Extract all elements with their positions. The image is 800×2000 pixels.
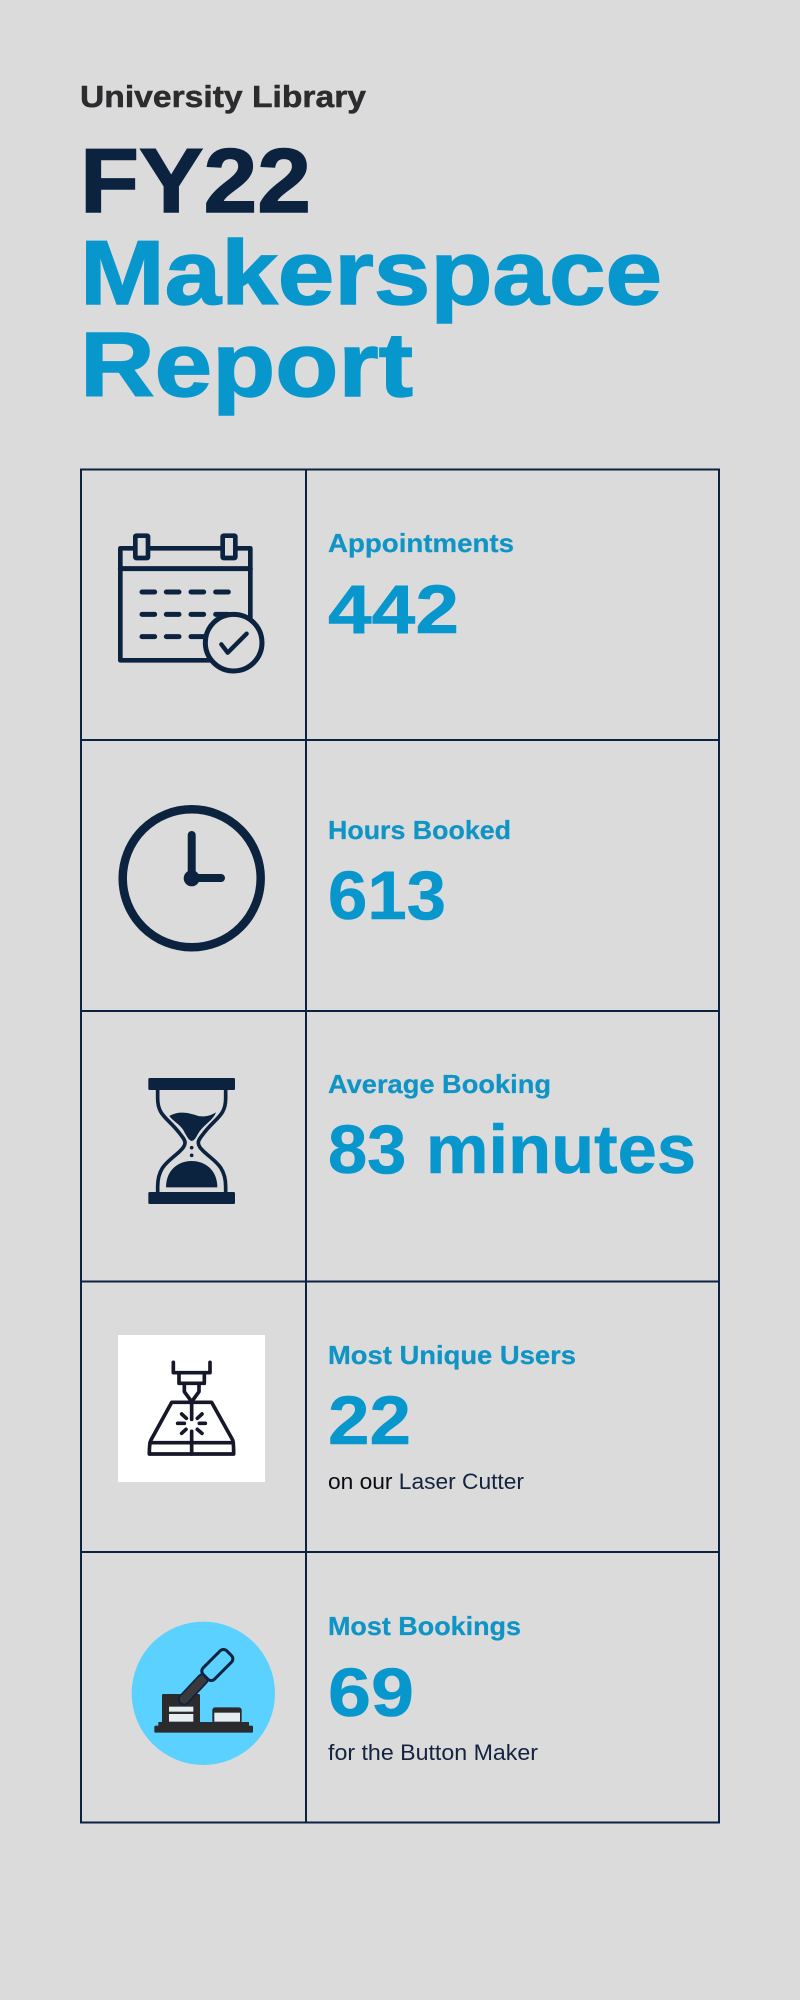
value: 22: 22 — [328, 1382, 411, 1459]
icon: clock — [123, 809, 261, 947]
icon: calendar with check mark — [120, 536, 262, 671]
label: Most Bookings: Most Bookings — [328, 1611, 521, 1641]
caption: for the Button Maker: for the Button Maker — [328, 1740, 538, 1765]
panel: statistics table — [81, 470, 719, 1822]
row: appointments — [120, 528, 514, 671]
row: most unique users — [118, 1335, 576, 1494]
row: hours booked — [123, 809, 511, 947]
value: 83 minutes: 83 minutes — [328, 1111, 696, 1188]
title line: FY22: FY22 — [80, 131, 311, 232]
icon: hourglass — [148, 1078, 235, 1204]
label: Appointments: Appointments — [328, 528, 514, 558]
row: most bookings — [132, 1611, 538, 1765]
label: Hours Booked: Hours Booked — [328, 815, 511, 845]
value: 69: 69 — [328, 1654, 414, 1731]
title line: Makerspace: Makerspace — [80, 223, 662, 324]
row: average booking — [148, 1069, 696, 1204]
title line: Report: Report — [80, 315, 413, 416]
label: Most Unique Users: Most Unique Users — [328, 1340, 576, 1370]
icon: laser cutter on white tile — [118, 1335, 265, 1482]
caption: on our Laser Cutter: on our Laser Cutter — [328, 1469, 524, 1494]
label: Average Booking: Average Booking — [328, 1069, 551, 1099]
value: 442: 442 — [328, 571, 459, 648]
value: 613: 613 — [328, 857, 446, 934]
header: organisation and report title — [80, 79, 662, 416]
organisation name: University Library — [80, 79, 367, 114]
icon: button maker in blue circle — [132, 1622, 275, 1765]
